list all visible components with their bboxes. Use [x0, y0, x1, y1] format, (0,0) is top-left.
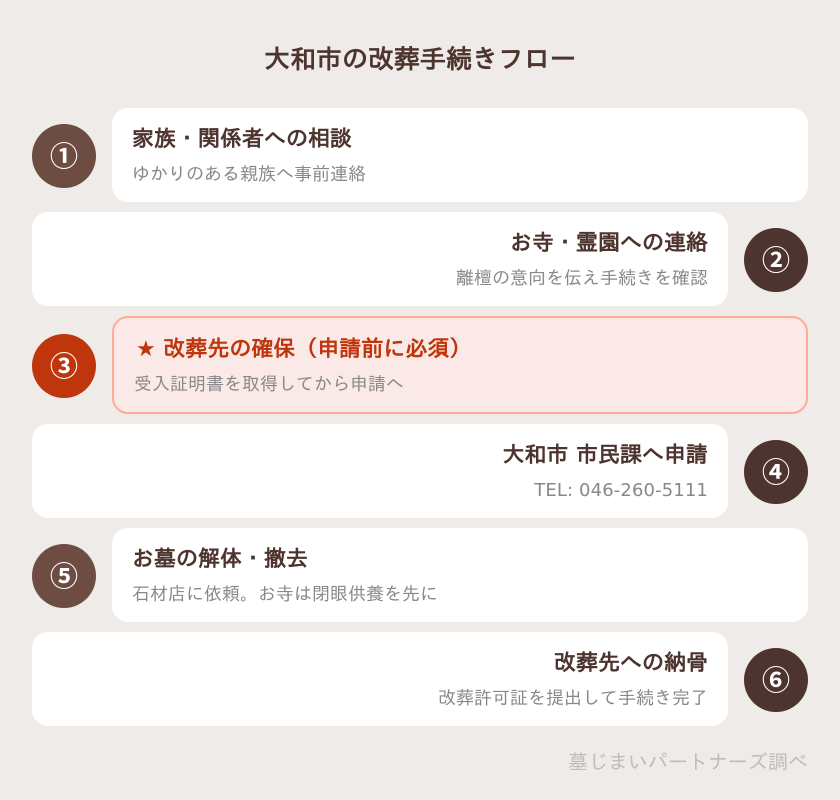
step 2 number badge — [744, 228, 808, 292]
step 2 description: 離檀の意向を伝え手続きを確認 — [456, 268, 708, 289]
step 5 card — [112, 528, 808, 622]
step 1 number badge: ① — [50, 135, 78, 175]
step 6 number badge — [744, 648, 808, 712]
step 2 number badge: ② — [762, 239, 790, 279]
step 4 description: TEL: 046-260-5111 — [534, 480, 708, 501]
step 3 number badge: ③ — [50, 345, 78, 385]
step 4 number badge: ④ — [762, 451, 790, 491]
step 5 number badge: ⑤ — [50, 555, 78, 595]
step 3 card — [112, 316, 808, 414]
step 5 heading: お墓の解体・撤去 — [132, 547, 308, 572]
step 6 — [32, 632, 808, 726]
step 6 heading: 改葬先への納骨 — [554, 651, 708, 676]
step 1 number badge — [32, 124, 96, 188]
step 6 card — [32, 632, 728, 726]
step 3 number badge — [32, 334, 96, 398]
step 3 description: 受入証明書を取得してから申請へ — [134, 374, 404, 395]
step 4 — [32, 424, 808, 518]
step 3 heading: ★ 改葬先の確保（申請前に必須） — [136, 337, 471, 362]
step 1 description: ゆかりのある親族へ事前連絡 — [132, 164, 366, 185]
step 5 number badge — [32, 544, 96, 608]
step 4 heading: 大和市 市民課へ申請 — [502, 443, 708, 468]
step 1 — [32, 108, 808, 202]
step 5 — [32, 528, 808, 622]
source note: 墓じまいパートナーズ調べ — [568, 750, 808, 774]
step 2 card — [32, 212, 728, 306]
step 1 card — [112, 108, 808, 202]
step 2 heading: お寺・霊園への連絡 — [510, 231, 708, 256]
step 3 highlighted — [32, 316, 808, 414]
title: 大和市の改葬手続きフロー — [264, 45, 576, 75]
step 4 number badge — [744, 440, 808, 504]
step 6 number badge: ⑥ — [762, 659, 790, 699]
step 4 card — [32, 424, 728, 518]
step 6 description: 改葬許可証を提出して手続き完了 — [438, 688, 708, 709]
step 5 description: 石材店に依頼。お寺は閉眼供養を先に — [132, 584, 438, 605]
step 1 heading: 家族・関係者への相談 — [132, 127, 352, 152]
step 2 — [32, 212, 808, 306]
